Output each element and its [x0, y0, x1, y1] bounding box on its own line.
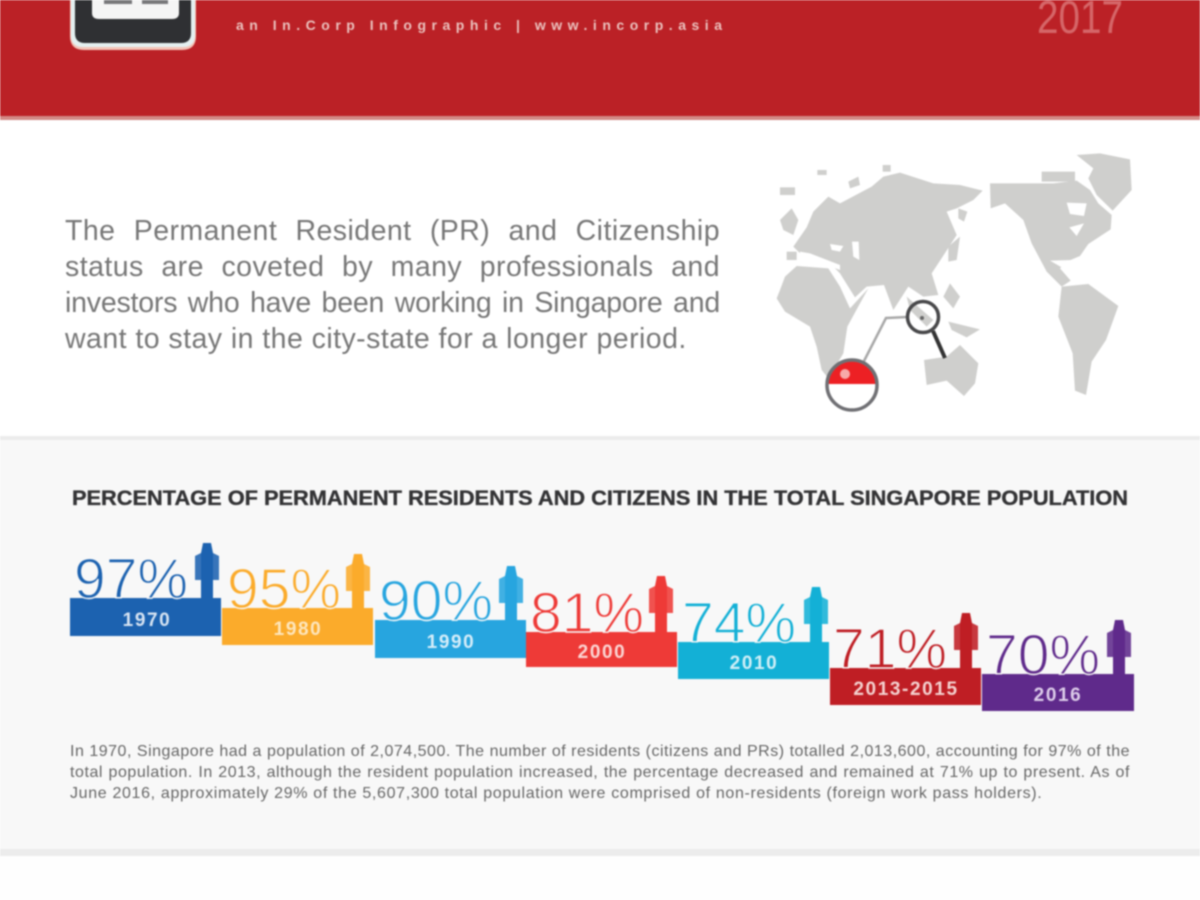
chart: resident share by year: [70, 543, 1134, 711]
text block: population note: June 2016, approximately 29% of the 5,607,300 total population were comprised of non-residents (foreign work pass holders).: [70, 785, 1042, 802]
step: 2010 74%: 2010: [730, 653, 778, 674]
tagline: an In.Corp Infographic | www.incorp.asia: [236, 17, 722, 33]
step: 1980 95%: 1980: [274, 619, 322, 640]
callout line: [864, 317, 907, 361]
icon: company logo: [70, 0, 196, 50]
step: 1990 90%: [375, 566, 526, 658]
heading: population chart: PERCENTAGE OF PERMANENT RESIDENTS AND CITIZENS IN THE TOTAL SINGAPORE POPULATION: [72, 487, 1128, 510]
step: 1970 97%: 97%: [74, 547, 188, 611]
panel: red header: [0, 0, 1200, 120]
step: 2000 81%: 2000: [578, 642, 626, 663]
step: 1980 95%: [222, 554, 373, 645]
icon: Singapore flag circle: [827, 359, 877, 410]
step: 2016 70%: [982, 620, 1134, 711]
text block: population note: In 1970, Singapore had a population of 2,074,500. The number of residents (citizens and PRs) totalled 2,013,600, accounting for 97% of the: [70, 743, 1130, 760]
step: 2010 74%: 74%: [682, 591, 796, 655]
text block: population note: total population. In 2013, although the resident population increased, the percentage decreased and remained at 71% up to present. As of: [70, 764, 1130, 781]
step: 2010 74%: [678, 587, 829, 679]
text block: introduction: status are coveted by many professionals and: [65, 251, 720, 283]
step: 2013-2015 71%: 71%: [833, 617, 947, 681]
step: 1970 97%: 1970: [123, 610, 171, 631]
text block: introduction: investors who have been working in Singapore and: [65, 287, 720, 319]
step: 1970 97%: [70, 543, 221, 636]
step: 2000 81%: [526, 576, 677, 667]
text block: introduction: want to stay in the city-state for a longer period.: [65, 323, 687, 355]
step: 1980 95%: 95%: [227, 557, 341, 621]
step: 2000 81%: 81%: [530, 581, 644, 645]
step: 2016 70%: 2016: [1034, 685, 1082, 706]
icon: magnifying glass: [908, 302, 945, 358]
map cut-outs: seas and lakes: [799, 203, 1087, 270]
icon: world map with Singapore locator: [777, 153, 1132, 410]
text block: introduction: The Permanent Resident (PR) and Citizenship: [65, 215, 720, 247]
text block: introduction: [64, 215, 720, 355]
step: 1990 90%: 90%: [379, 569, 493, 633]
step: 1990 90%: 1990: [427, 632, 475, 653]
step: 2013-2015 71%: [830, 613, 981, 705]
step: 2013-2015 71%: 2013-2015: [853, 679, 959, 700]
step: 2016 70%: 70%: [986, 623, 1100, 687]
